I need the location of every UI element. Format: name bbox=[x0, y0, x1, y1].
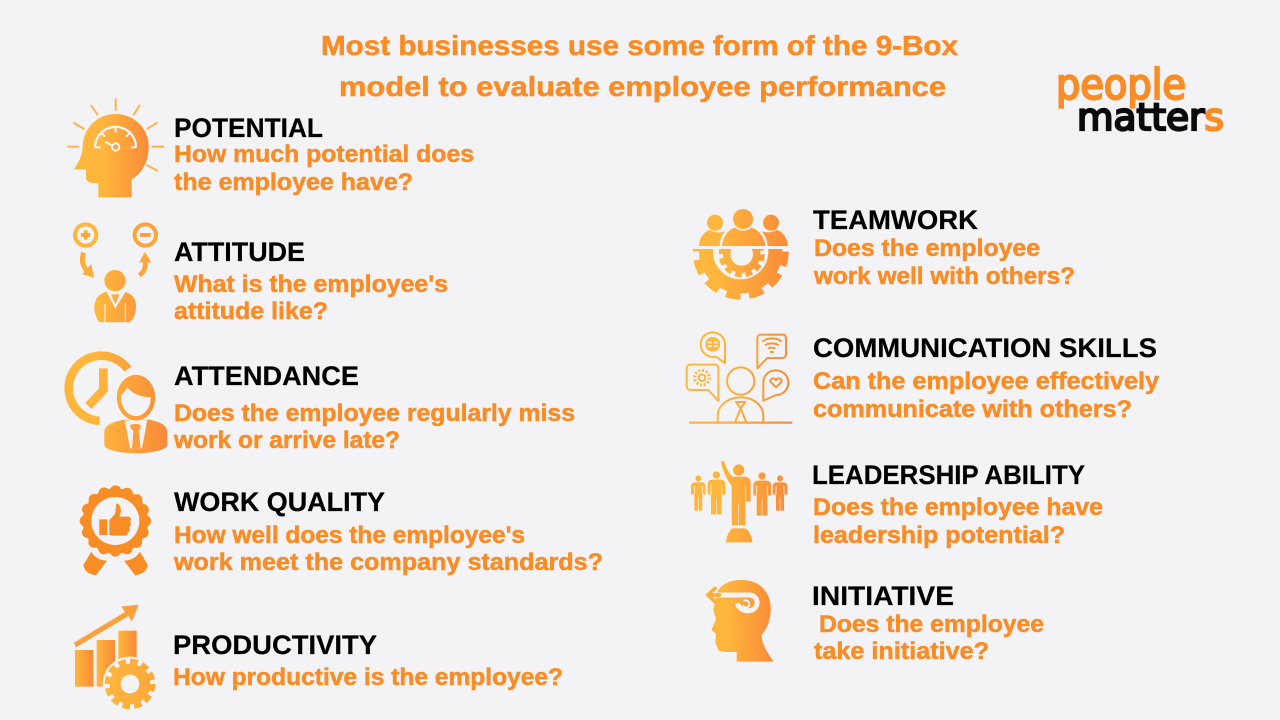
icon: team on gear bbox=[696, 207, 788, 296]
description: Does the employee regularly miss bbox=[174, 400, 575, 427]
icon: person with plus and minus bbox=[75, 224, 156, 322]
heading: ATTITUDE bbox=[174, 237, 305, 267]
heading: PRODUCTIVITY bbox=[173, 630, 377, 660]
description: Does the employee have bbox=[813, 494, 1103, 521]
heading: COMMUNICATION SKILLS bbox=[813, 333, 1157, 363]
description bbox=[813, 368, 1159, 423]
panel: attendance bbox=[69, 356, 575, 454]
description bbox=[813, 494, 1103, 549]
heading: LEADERSHIP ABILITY bbox=[812, 460, 1085, 490]
description: work well with others? bbox=[813, 263, 1075, 290]
title: model to evaluate employee performance bbox=[339, 71, 946, 102]
panel: attitude bbox=[75, 224, 448, 325]
panel: initiative bbox=[708, 580, 1044, 665]
description: How much potential does bbox=[174, 141, 474, 168]
description: How productive is the employee? bbox=[173, 664, 563, 691]
heading: ATTENDANCE bbox=[174, 361, 359, 391]
icon: head with backward arrow bbox=[708, 580, 773, 662]
logo: people matters: people bbox=[1056, 60, 1186, 109]
icon: person with speech bubbles bbox=[687, 332, 792, 423]
description: Can the employee effectively bbox=[813, 368, 1159, 395]
description: take initiative? bbox=[814, 638, 989, 665]
logo: people matters bbox=[1056, 60, 1224, 139]
heading: WORK QUALITY bbox=[174, 487, 385, 517]
icon: clock with employee bbox=[69, 356, 167, 453]
panel: work quality bbox=[83, 487, 603, 576]
description: Does the employee bbox=[814, 235, 1040, 262]
title bbox=[321, 30, 958, 102]
logo: people matters: matters bbox=[1077, 96, 1224, 139]
description bbox=[813, 235, 1075, 290]
icon: leader with team bbox=[691, 461, 787, 542]
icon: bar chart with arrow and gear bbox=[74, 605, 157, 711]
heading: POTENTIAL bbox=[174, 113, 323, 143]
description: work or arrive late? bbox=[173, 427, 400, 454]
description: communicate with others? bbox=[813, 396, 1132, 423]
description: Does the employee bbox=[819, 611, 1044, 638]
description: What is the employee's bbox=[174, 271, 448, 298]
description bbox=[174, 271, 448, 325]
description: How well does the employee's bbox=[174, 522, 525, 549]
description bbox=[174, 141, 474, 196]
heading: INITIATIVE bbox=[812, 581, 954, 611]
heading: TEAMWORK bbox=[813, 205, 978, 235]
icon: badge with thumbs up bbox=[83, 488, 148, 575]
panel: potential bbox=[67, 98, 474, 197]
panel: teamwork bbox=[696, 205, 1075, 296]
description bbox=[173, 522, 603, 576]
description: leadership potential? bbox=[813, 522, 1065, 549]
panel: productivity bbox=[74, 605, 563, 711]
description: the employee have? bbox=[174, 169, 413, 196]
panel: leadership ability bbox=[691, 460, 1103, 549]
icon: head with gauge bbox=[67, 98, 164, 197]
panel: communication skills bbox=[687, 332, 1159, 423]
description bbox=[814, 611, 1044, 665]
title: Most businesses use some form of the 9-Box bbox=[321, 30, 958, 61]
description: work meet the company standards? bbox=[173, 549, 603, 576]
description bbox=[173, 400, 575, 454]
description: attitude like? bbox=[174, 298, 328, 325]
